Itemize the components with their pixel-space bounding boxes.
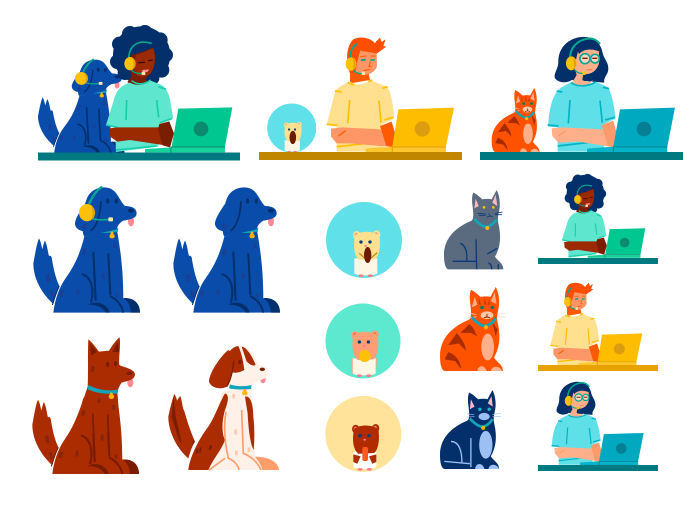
hamster bubble [267, 104, 316, 153]
desk [538, 465, 658, 471]
orange cat [492, 88, 542, 152]
top scene: cat with agent [480, 37, 683, 160]
hamster in yellow circle [325, 396, 401, 472]
blue dog [173, 187, 280, 313]
agent with yellow shirt and red hair [327, 37, 454, 152]
brown dog [32, 337, 139, 474]
small agent with red hair [538, 283, 658, 371]
small agent with afro [538, 174, 658, 264]
top scene: hamster with agent [259, 37, 462, 160]
small agent with glasses [538, 382, 658, 471]
desk [538, 258, 658, 264]
desk [38, 152, 240, 160]
hamster in blue circle [326, 202, 402, 278]
desk [480, 152, 683, 160]
agent with teal shirt and afro [106, 25, 232, 152]
blue dog with headset [33, 187, 140, 313]
dog with headset [38, 59, 124, 153]
navy cat [440, 390, 501, 469]
desk [538, 365, 658, 371]
hamster in green circle [326, 304, 400, 378]
spotted dog [168, 346, 279, 470]
grey cat [444, 190, 503, 269]
agent with blue shirt and glasses [548, 37, 675, 152]
orange cat [440, 287, 506, 371]
desk [259, 152, 462, 160]
top scene: dog with agent [38, 25, 240, 161]
